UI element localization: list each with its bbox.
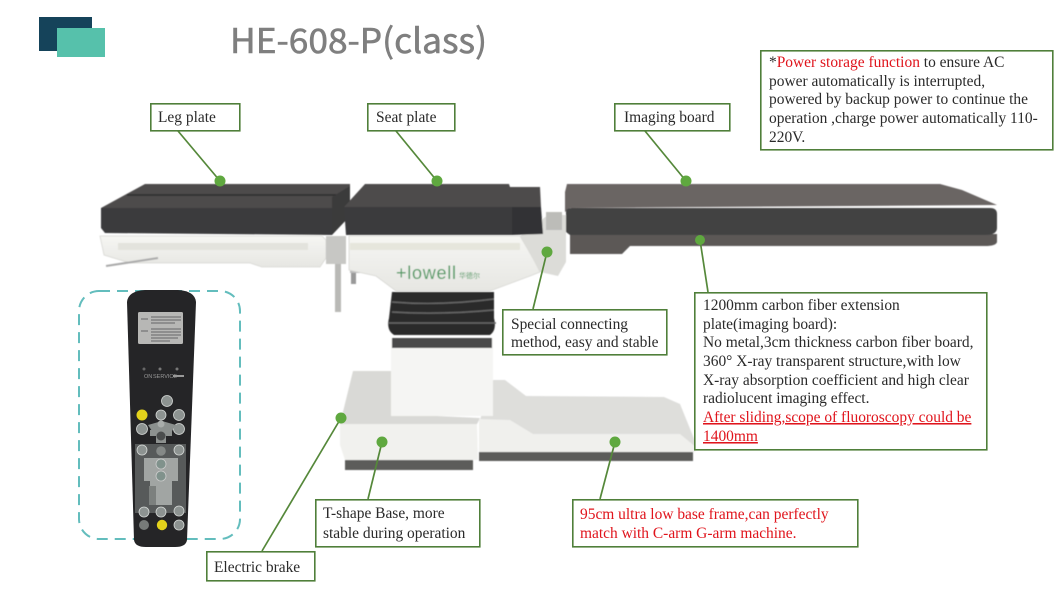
- callout: ultra low base frame: match with C-arm G-arm machine.: [580, 525, 796, 542]
- callout: ultra low base frame: [573, 436, 858, 547]
- column: [388, 292, 496, 416]
- callout: leg plate: Leg plate: [158, 109, 216, 126]
- callout: leg plate: [151, 104, 240, 186]
- remote lower buttons: [139, 506, 184, 530]
- callout: electric brake: Electric brake: [214, 559, 300, 576]
- leg plate rail: [100, 236, 326, 267]
- operating table illustration: [100, 184, 997, 470]
- panel: remote control: [79, 290, 240, 547]
- callout: T-shape base: [316, 436, 480, 547]
- remote screen: [138, 312, 183, 344]
- remote body: [127, 290, 196, 547]
- title: HE-608-P(class): [230, 14, 487, 63]
- seat plate rail: [349, 236, 540, 291]
- callout: power storage function: 220V.: [769, 129, 805, 146]
- callout: carbon fiber extension plate: No metal,3cm thickness carbon fiber board,: [703, 334, 974, 351]
- clamp: [326, 236, 360, 312]
- callout: carbon fiber extension plate: After sliding,scope of fluoroscopy could be: [703, 409, 972, 426]
- callout: carbon fiber extension plate: radiolucent imaging effect.: [703, 390, 869, 407]
- callout: special connecting method: [503, 246, 667, 355]
- callout: carbon fiber extension plate: X-ray absorption coefficient and high clear: [703, 372, 969, 389]
- callout: ultra low base frame: 95cm ultra low base frame,can perfectly: [580, 506, 829, 523]
- callout: special connecting method: method, easy and stable: [511, 334, 659, 351]
- callout: imaging board: [615, 104, 730, 186]
- callout: power storage function: powered by backup power to continue the: [769, 91, 1028, 108]
- seat plate pad: [344, 184, 543, 235]
- callout: imaging board: Imaging board: [624, 109, 715, 126]
- callout: power storage function: *Power storage function to ensure AC: [769, 54, 1004, 71]
- callout: T-shape base: stable during operation: [323, 525, 466, 542]
- remote upper buttons: [136, 396, 184, 443]
- remote indicators: [142, 368, 184, 380]
- callout: power storage function: operation ,charge power automatically 110-: [769, 110, 1038, 127]
- callout: carbon fiber extension plate: 1200mm carbon fiber extension: [703, 297, 900, 314]
- brand logo: +lowell: [396, 263, 456, 283]
- callout: carbon fiber extension plate: 360° X-ray transparent structure,with low: [703, 353, 962, 370]
- logo mark: [39, 17, 105, 57]
- dashed frame: [79, 291, 240, 539]
- callout: electric brake: [207, 412, 346, 581]
- imaging board: [565, 184, 997, 254]
- callout: carbon fiber extension plate: [695, 235, 987, 450]
- callout: carbon fiber extension plate: 1400mm: [703, 428, 758, 445]
- remote indicators: SERVICE: [153, 374, 177, 380]
- hinge: [520, 215, 566, 276]
- leg plate pad: [101, 184, 350, 235]
- base: [340, 371, 697, 470]
- callout: power storage function: power automatically is interrupted,: [769, 73, 985, 90]
- remote patient panel: [135, 444, 186, 513]
- remote indicators: ON: [144, 374, 152, 380]
- callout: T-shape base: T-shape Base, more: [323, 505, 445, 522]
- callout: seat plate: Seat plate: [376, 109, 437, 126]
- operating table illustration: 华德尔: [459, 271, 480, 281]
- callout: carbon fiber extension plate: plate(imaging board):: [703, 316, 837, 333]
- callout: special connecting method: Special connecting: [511, 316, 628, 333]
- callout: power storage function: [761, 51, 1053, 150]
- callout: seat plate: [368, 104, 455, 186]
